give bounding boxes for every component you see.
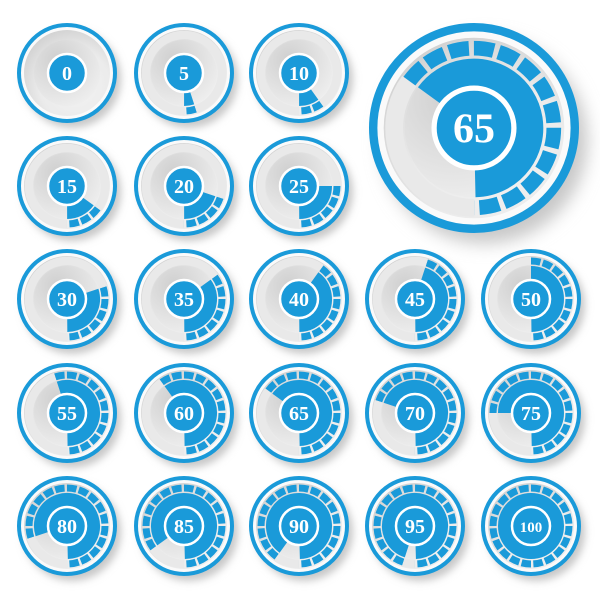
- center badge 45: 45: [405, 289, 425, 311]
- center badge 30: 30: [57, 289, 77, 311]
- gauge 50: [483, 251, 585, 354]
- center badge 35: 35: [174, 289, 194, 311]
- center badge 65: [434, 88, 514, 168]
- gauge 35: [131, 246, 238, 354]
- center badge 90: 90: [289, 516, 309, 538]
- gauge 40: [246, 246, 353, 354]
- gauge 85: [131, 473, 238, 581]
- gauge 70: [367, 365, 469, 468]
- center badge 25: 25: [289, 176, 309, 198]
- gauge 10: [246, 20, 353, 128]
- center badge 40: 40: [289, 289, 309, 311]
- gauge 60: [131, 360, 238, 468]
- gauge 20: [136, 138, 238, 241]
- gauge 25: [251, 138, 353, 241]
- center badge 15: 15: [57, 176, 77, 198]
- center badge 20: 20: [174, 176, 194, 198]
- center badge 50: 50: [521, 289, 541, 311]
- center badge 100: 100: [520, 520, 542, 536]
- gauge 95: [367, 478, 469, 581]
- center badge 95: 95: [405, 516, 425, 538]
- gauge 80: [19, 478, 121, 581]
- center badge 80: 80: [57, 516, 77, 538]
- gauge 55: [19, 365, 121, 468]
- gauge 75: [483, 365, 585, 468]
- center badge 0: 0: [62, 63, 72, 85]
- gauge 5: [136, 25, 238, 128]
- center badge 55: 55: [57, 403, 77, 425]
- center badge 60: 60: [174, 403, 194, 425]
- center badge 65 small: 65: [289, 403, 309, 425]
- center badge 75: 75: [521, 403, 541, 425]
- gauge 45: [367, 251, 469, 354]
- gauge 15: [14, 133, 121, 241]
- gauge 30: [19, 251, 121, 354]
- gauge 65 small: [246, 360, 353, 468]
- gauge 0: [19, 25, 121, 128]
- center badge 70: 70: [405, 403, 425, 425]
- gauge 90: [246, 473, 353, 581]
- center badge 85: 85: [174, 516, 194, 538]
- gauge 100: [483, 478, 585, 581]
- center badge 65: 65: [453, 107, 495, 153]
- big gauge 65: [363, 17, 587, 244]
- center badge 10: 10: [289, 63, 309, 85]
- center badge 5: 5: [179, 63, 189, 85]
